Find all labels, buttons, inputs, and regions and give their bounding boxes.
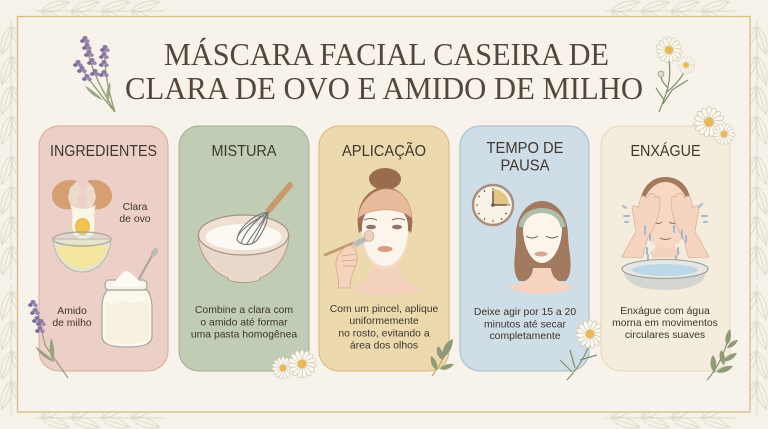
heading: tempo de pausa: PAUSA <box>500 158 550 174</box>
icon: chamomile flower <box>560 320 604 380</box>
text: tempo de pausa instructions: minutos até secar <box>484 320 567 330</box>
text: enxágue instructions: morna em movimentos <box>612 318 718 329</box>
icon: daisies <box>272 350 316 379</box>
text: amido de milho: Amido <box>57 306 87 317</box>
illustration: woman resting with mask <box>508 201 574 294</box>
text: aplicação instructions: uniformemente <box>349 316 419 327</box>
text: amido de milho: de milho <box>52 318 92 329</box>
text: tempo de pausa instructions: Deixe agir por 15 a 20 <box>474 307 576 318</box>
title <box>125 36 643 106</box>
icon: daisies <box>694 107 735 145</box>
icon: lavender bouquet <box>73 36 115 112</box>
heading: ingredientes: INGREDIENTES <box>50 143 157 160</box>
icon: jar of corn starch <box>102 247 159 347</box>
heading: tempo de pausa: TEMPO DE <box>486 140 564 157</box>
icon: clock <box>473 185 513 225</box>
title: CLARA DE OVO E AMIDO DE MILHO <box>125 70 643 106</box>
text: aplicação instructions: área dos olhos <box>350 340 418 352</box>
illustration: woman applying mask with brush <box>325 168 423 295</box>
text: clara de ovo: Clara <box>123 202 148 213</box>
panel: enxágue <box>601 107 738 380</box>
text: mistura instructions: uma pasta homogênea <box>191 330 297 340</box>
heading: aplicação: APLICAÇÃO <box>342 143 426 160</box>
illustration: rinsing face over basin <box>622 177 709 290</box>
icon: olive sprig <box>707 329 738 380</box>
text: enxágue instructions: Enxágue com água <box>620 306 710 317</box>
icon: leaf sprig <box>431 339 454 376</box>
text: enxágue instructions: circulares suaves <box>625 330 705 341</box>
heading: enxágue: ENXÁGUE <box>630 143 700 160</box>
text: aplicação instructions: no rosto, evitando a <box>338 328 430 340</box>
panel: mistura <box>179 126 316 379</box>
icon: cracked egg over bowl <box>52 180 112 272</box>
icon: lavender sprig <box>28 300 68 378</box>
text: aplicação instructions: Com um pincel, aplique <box>330 304 439 315</box>
text: clara de ovo: de ovo <box>119 214 151 225</box>
panel: tempo de pausa <box>460 126 604 380</box>
text: tempo de pausa instructions: completamente <box>489 331 561 342</box>
heading: mistura: MISTURA <box>212 143 277 160</box>
icon: chamomile sprig <box>656 37 695 112</box>
panel: ingredientes <box>28 126 168 378</box>
heading: tempo de pausa <box>486 140 564 174</box>
title: MÁSCARA FACIAL CASEIRA DE <box>164 36 609 72</box>
text: mistura instructions: Combine a clara com <box>195 305 293 316</box>
icon: bowl with whisk <box>198 185 290 282</box>
panel: aplicação <box>319 126 454 376</box>
text: mistura instructions: o amido até formar <box>200 318 288 328</box>
